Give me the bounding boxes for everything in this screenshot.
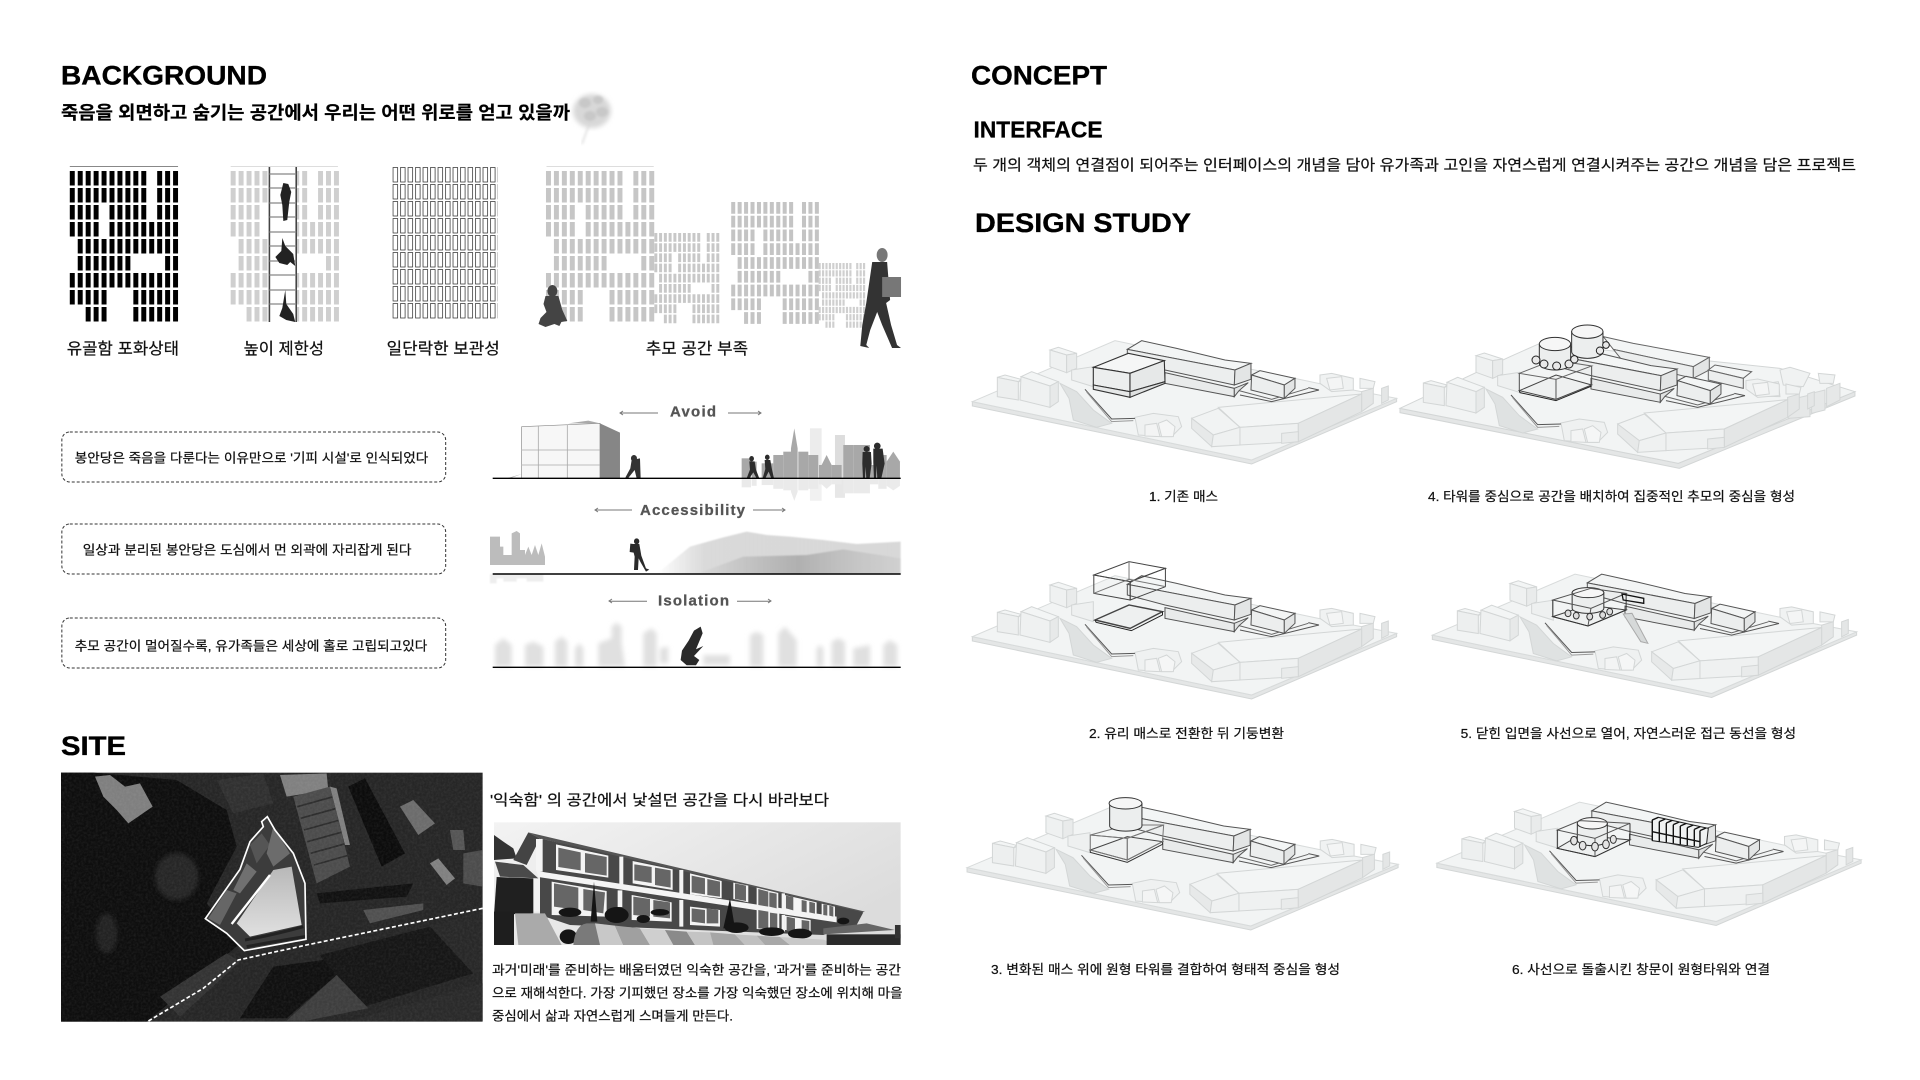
label: isolation (609, 593, 771, 610)
building grid black (70, 178, 178, 314)
callout: moved to outskirts: 일상과 분리된 봉안당은 도심에서 먼 외곽에 자리잡게 된다 (83, 542, 412, 558)
figure: walking person (630, 538, 649, 572)
heading: background: BACKGROUND (61, 60, 267, 90)
dashed access road (147, 908, 483, 1022)
outlined cell grid (393, 167, 498, 320)
icon: ladder with figures (269, 167, 296, 322)
label: avoid: Avoid (670, 404, 716, 421)
photo: school building (494, 822, 901, 945)
label: isolation: Isolation (658, 593, 729, 610)
figure: walking man with box (860, 248, 901, 348)
facade (540, 838, 863, 935)
study 6: diagonal windows (1437, 802, 1861, 977)
text: interface description: 두 개의 객체의 연결점이 되어주는 인터페이스의 개념을 담아 유가족과 고인을 자연스럽게 연결시켜주는 공간으 개념을 담은 프로젝트 (973, 157, 1856, 174)
white bands and pillars (533, 839, 837, 932)
tree backdrop and roof (494, 832, 865, 914)
caption: lack of space: 추모 공간 부족 (646, 340, 748, 358)
icon: faded flower (573, 94, 611, 144)
heading: design study: DESIGN STUDY (975, 208, 1191, 238)
text: site description: 중심에서 삶과 자연스럽게 스며들게 만든다. (492, 1008, 733, 1024)
callout: bereaved isolation (62, 618, 446, 668)
caption 2: 2. 유리 매스로 전환한 뒤 기둥변환 (1089, 726, 1284, 741)
tower and frame (1090, 798, 1164, 862)
panel: height limit (231, 166, 339, 358)
building grid grey (231, 178, 339, 314)
skyline of grid buildings (546, 166, 865, 325)
wire box and slab (1094, 562, 1165, 631)
caption 5: 5. 닫힌 입면을 사선으로 열어, 자연스러운 접근 동선을 형성 (1461, 726, 1796, 741)
label: avoid (620, 404, 761, 421)
study 4: towers with columns (1400, 325, 1855, 504)
striped awning (573, 923, 840, 945)
frame, tower, path (1553, 588, 1648, 643)
label: accessibility: Accessibility (640, 502, 746, 519)
caption: height limit: 높이 제한성 (244, 340, 324, 358)
callout: bereaved isolation: 추모 공간이 멀어질수록, 유가족들은 세상에 홀로 고립되고있다 (75, 638, 427, 654)
caption 4: 4. 타워를 중심으로 공간을 배치하여 집중적인 추모의 중심을 형성 (1428, 489, 1795, 504)
panel: lack of memorial space (539, 166, 901, 358)
city skyline left (490, 531, 545, 583)
left gazebo and stairs (494, 862, 562, 945)
figure: seated person (625, 455, 641, 478)
figure: fallen person (681, 627, 703, 665)
figure: seated man (539, 285, 567, 327)
subtitle: background question: 죽음을 외면하고 숨기는 공간에서 우리는 어떤 위로를 얻고 있을까 (61, 103, 570, 123)
diagram: isolation (493, 593, 901, 667)
heading: concept: CONCEPT (971, 60, 1108, 90)
callout: moved to outskirts (62, 524, 446, 574)
towers and frame (1519, 325, 1609, 401)
caption: saturation: 유골함 포화상태 (67, 340, 179, 358)
callout: avoided facility (62, 432, 446, 482)
panel: saturated columbarium (67, 166, 179, 358)
study 5: opened facade and path (1432, 574, 1857, 741)
forest (61, 773, 240, 1022)
text: site description (492, 962, 903, 1024)
text: site description: 과거'미래'를 준비하는 배움터였던 익숙한 공간을, '과거'를 준비하는 공간 (492, 962, 901, 978)
heading: interface: INTERFACE (974, 116, 1102, 142)
surrounding buildings (95, 773, 483, 1017)
study 3: cylinder tower on mass (967, 798, 1398, 977)
garden trees (559, 882, 849, 944)
left column top: building studies and callouts (62, 166, 901, 668)
label: accessibility (595, 502, 785, 519)
fields (240, 910, 483, 1021)
text: site description: 으로 재해석한다. 가장 기피했던 장소를 가장 익숙했던 장소에 위치해 마을 (492, 986, 903, 1000)
pavilion (823, 923, 901, 945)
study 2: glass mass (972, 562, 1397, 741)
blurred crowd (495, 623, 897, 667)
city skyline with reflection (742, 428, 900, 501)
windows upper and lower (554, 848, 833, 931)
text: rediscover heading: '익숙함' 의 공간에서 낯설던 공간을 다시 바라보다 (490, 792, 829, 809)
site boundary (205, 817, 306, 951)
caption 6: 6. 사선으로 돌출시킨 창문이 원형타워와 연결 (1512, 962, 1770, 977)
wider ground and rear volumes (1400, 343, 1855, 468)
caption: storage: 일단락한 보관성 (387, 340, 500, 358)
aerial site map (61, 773, 483, 1022)
caption 3: 3. 변화된 매스 위에 원형 타워를 결합하여 형태적 중심을 형성 (991, 962, 1340, 977)
mountains (657, 532, 901, 574)
caption 1: 1. 기존 매스 (1149, 489, 1218, 504)
frame, tower, window fins (1557, 817, 1708, 857)
diagram: avoid (493, 404, 901, 501)
study 1: existing mass (972, 341, 1397, 504)
diagram: accessibility (490, 502, 901, 583)
heading: site: SITE (61, 731, 126, 761)
panel: uniform storage (387, 167, 500, 358)
concrete building (507, 421, 620, 478)
callout: avoided facility: 봉안당은 죽음을 다룬다는 이유만으로 '기피 시설'로 인식되었다 (75, 450, 428, 466)
cube mass (1093, 353, 1165, 397)
